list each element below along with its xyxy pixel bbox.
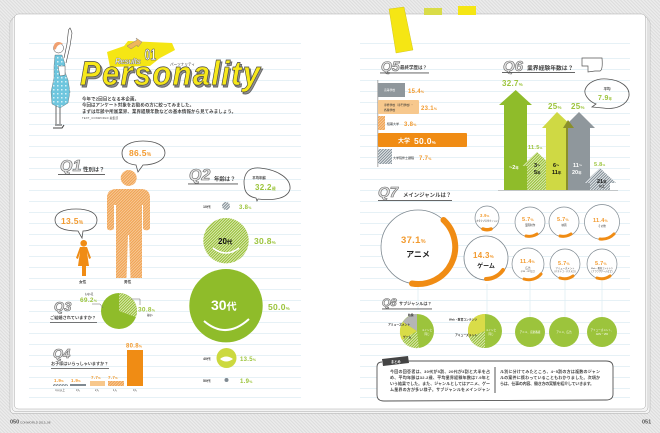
heading: Q3 bbox=[50, 299, 97, 323]
arrow labels: 以上 bbox=[599, 184, 605, 188]
circle: anime: 37.1% bbox=[401, 235, 426, 246]
arrow: 11-20 years bbox=[563, 112, 595, 190]
heading: Q8: サブジャンルは？ bbox=[399, 300, 432, 306]
circle: esports bbox=[475, 206, 499, 230]
arrow labels: 5.8% bbox=[594, 162, 606, 168]
panel: Q5 education bbox=[378, 58, 467, 167]
50s row: 50代 bbox=[203, 378, 211, 383]
circle: web bbox=[587, 249, 617, 279]
heading: Q1 bbox=[58, 158, 105, 175]
bar chart bbox=[53, 344, 143, 392]
icon: woman bbox=[76, 240, 91, 276]
tag: summary bbox=[382, 356, 409, 366]
icon: arrow bbox=[127, 38, 142, 49]
arrow labels: 25% bbox=[548, 102, 562, 111]
circle: film bbox=[549, 207, 579, 237]
heading: Q8 bbox=[382, 297, 432, 309]
callout: 13.5% bbox=[55, 209, 97, 238]
summary text: ム業界の方が多い様子。サブジャンルをメインジャン bbox=[390, 386, 490, 392]
circle: anime, music programs: アニメ、音楽番組 bbox=[520, 330, 541, 334]
circle: esports: オタクプロダクション bbox=[476, 218, 498, 222]
bar: high school: 15.4% bbox=[408, 89, 425, 95]
heading: Q8: Q8 bbox=[382, 297, 398, 309]
circle: production: 漫画制作 bbox=[525, 223, 536, 227]
bar: junior college bbox=[378, 116, 417, 130]
bar chart: 80.8% bbox=[126, 344, 143, 350]
bar: high school bbox=[378, 83, 425, 97]
panel: Q8 sub genre bbox=[382, 297, 617, 348]
arrow labels: 21年 bbox=[597, 179, 607, 185]
panel: Q7 main genre bbox=[378, 184, 620, 284]
bar: vocational: 専修学校（専門学校）・ bbox=[384, 103, 413, 107]
10s row: 10代 bbox=[203, 204, 211, 209]
heading: Q1: 性別は？ bbox=[83, 166, 105, 174]
panel: Q4 children bbox=[51, 344, 143, 392]
bar chart: 7.7% bbox=[108, 375, 118, 380]
arrow labels: 5年 bbox=[534, 170, 541, 176]
bar chart: 3人 bbox=[76, 388, 80, 392]
title: Personality: Personality bbox=[82, 57, 263, 94]
pie: anime sub genre bbox=[388, 313, 434, 348]
circle: production bbox=[515, 207, 545, 237]
10s row: 3.8% bbox=[239, 205, 252, 211]
50s row: 1.9% bbox=[240, 379, 253, 385]
title: Results 01 badge: Results bbox=[115, 57, 142, 66]
circle: amusement, adv: アミューズメント、 bbox=[590, 328, 614, 332]
bar: graduate school bbox=[378, 149, 432, 164]
bar chart: 4人以上 bbox=[55, 388, 65, 392]
callout: average experience bbox=[585, 79, 629, 108]
panel: Q3 marriage: 69.2% bbox=[80, 297, 98, 304]
10s row bbox=[203, 202, 252, 211]
intro text: TEXT_CONWORLD 編集部 bbox=[82, 116, 118, 120]
title: Results 01 badge: 01 bbox=[144, 46, 157, 64]
50s row bbox=[203, 378, 253, 385]
panel: Q1 gender: 男性 bbox=[124, 279, 132, 284]
circle: amusement bbox=[550, 249, 580, 279]
bar: vocational: 各種学校 bbox=[384, 108, 395, 112]
circle: web: 5.7% bbox=[595, 261, 608, 267]
heading: Q2: 年齢は？ bbox=[214, 175, 236, 183]
pie: anime sub genre: アミューズメント bbox=[388, 322, 410, 326]
summary text: いう結果でした。また、ジャンルとしてはアニメ、ゲー bbox=[390, 380, 490, 386]
40s bubble: 13.5% bbox=[240, 357, 257, 363]
circle: amusement: アミューズメント bbox=[556, 266, 575, 270]
heading: Q6: Q6 bbox=[503, 58, 524, 75]
40s bubble: 40代 bbox=[203, 356, 211, 361]
intro text bbox=[82, 96, 236, 120]
circle: anime, advertising bbox=[549, 317, 579, 347]
bar chart: 0人 bbox=[133, 388, 137, 392]
tag: summary: まとめ bbox=[391, 359, 401, 364]
20s bubble bbox=[203, 218, 276, 263]
circle: amusement, adv bbox=[587, 317, 617, 347]
callout: 86.5%: 86.5% bbox=[129, 148, 152, 158]
pie: anime sub genre: メインと bbox=[422, 328, 433, 332]
30s bubble: 30代 bbox=[211, 297, 237, 313]
arrow labels: 25% bbox=[571, 102, 585, 111]
circle: amusement: 5.7% bbox=[558, 261, 571, 267]
arrow labels: ~2年 bbox=[509, 165, 519, 171]
circle: anime bbox=[381, 210, 455, 284]
panel: Q1 gender: 女性 bbox=[79, 279, 87, 284]
heading: Q7: メインジャンルは？ bbox=[403, 192, 451, 199]
callout: 86.5% bbox=[122, 141, 165, 172]
circle: game: 14.3% bbox=[473, 251, 494, 260]
heading: Q2 bbox=[188, 167, 238, 184]
circle: game: ゲーム bbox=[477, 262, 495, 270]
bar chart: 1.9% bbox=[54, 378, 64, 383]
circle: advertising: 広告 bbox=[525, 266, 531, 270]
intro text: まずは年齢や所属業界、業界経験年数などの基本情報から見てみましょう。 bbox=[82, 108, 236, 115]
circle: other: その他 bbox=[598, 224, 606, 228]
pie: game sub genre: 同じ bbox=[488, 332, 494, 336]
summary text: ル別に分けてみたところ、4~5割の方は複数のジャン bbox=[500, 368, 600, 374]
callout: average age: 32.2歳 bbox=[255, 183, 276, 192]
bar chart: 2人 bbox=[95, 388, 99, 392]
icon: man bbox=[107, 170, 150, 278]
bar: junior college: 短期大学 bbox=[387, 121, 399, 126]
callout: 13.5%: 13.5% bbox=[61, 216, 84, 226]
arrow: up to 2 years bbox=[499, 90, 532, 190]
heading: Q4: お子様はいらっしゃいますか？ bbox=[51, 360, 108, 366]
heading: Q6: 業界経験年数は？ bbox=[527, 64, 573, 72]
pie: game sub genre: アミューズメント bbox=[455, 333, 477, 337]
arrow: 21+ years bbox=[584, 168, 616, 190]
sticky tabs bbox=[389, 6, 476, 53]
circle: film: 5.7% bbox=[557, 217, 570, 223]
circle: amusement, adv: ADV・VID bbox=[596, 332, 608, 336]
pie: game sub genre: Web・教育コンテンツ bbox=[449, 318, 477, 322]
panel: Q2 age bbox=[188, 167, 290, 385]
heading: Q5: 最終学歴は？ bbox=[400, 64, 427, 71]
title: Results 01 badge bbox=[107, 38, 175, 67]
20s bubble: 20代 bbox=[218, 237, 233, 246]
heading: Q7 bbox=[378, 184, 452, 201]
icon: hand note bbox=[582, 58, 602, 72]
circle: other bbox=[584, 204, 620, 240]
bar: junior college: 3.8% bbox=[404, 122, 417, 128]
heading: Q6 bbox=[502, 58, 575, 75]
panel: Q6 years of experience bbox=[498, 58, 629, 191]
arrow: 6-11 years bbox=[542, 112, 574, 190]
pie: anime sub genre: ゲーム bbox=[403, 335, 412, 339]
bar: graduate school: 大学院修士課程 bbox=[393, 155, 414, 160]
40s bubble bbox=[203, 348, 257, 368]
pie: anime sub genre: 同じ bbox=[424, 332, 430, 336]
circle: game bbox=[464, 236, 508, 280]
20s bubble: 30.8% bbox=[254, 236, 276, 246]
footer: right folio: 051 bbox=[642, 420, 651, 426]
30s bubble: 50.0% bbox=[268, 302, 290, 312]
callout: average experience: 平均 bbox=[604, 86, 611, 91]
illustration: pointing woman bbox=[51, 28, 72, 128]
heading: Q3: Q3 bbox=[54, 299, 72, 314]
summary text bbox=[390, 368, 600, 392]
heading: Q4 bbox=[51, 346, 109, 369]
panel: summary box bbox=[377, 356, 613, 401]
arrow labels: 11年 bbox=[552, 170, 562, 176]
30s bubble bbox=[189, 269, 290, 342]
circle: film: 映画 bbox=[561, 223, 567, 227]
circle: anime: アニメ bbox=[406, 250, 430, 259]
arrow labels: 20年 bbox=[572, 170, 582, 176]
callout: average experience: 7.9年 bbox=[598, 95, 613, 102]
circle: anime, music programs bbox=[515, 317, 545, 347]
arrow labels: 6~ bbox=[553, 163, 559, 169]
panel: Q3 marriage: いいえ bbox=[85, 292, 94, 296]
circle: web: Web・教育コンテンツ bbox=[591, 266, 613, 270]
circle: esports: 3.9% bbox=[480, 213, 490, 218]
arrow labels: 11.5% bbox=[528, 145, 543, 151]
title: Personality: パーソナリティ bbox=[170, 62, 195, 66]
intro text: 今年で2回目となる本企画。 bbox=[82, 96, 139, 102]
bar: university: 大学 bbox=[398, 137, 410, 145]
arrow labels bbox=[502, 79, 607, 188]
circle: other: 11.4% bbox=[593, 218, 609, 224]
heading: Q2: Q2 bbox=[189, 167, 210, 184]
heading: Q5: Q5 bbox=[381, 58, 400, 74]
intro text: 今回はアンケート対象をお勧めの方に絞ってみました。 bbox=[82, 102, 194, 108]
summary text: め、平均年齢は32.2歳、平均業界経験年数は7.9年と bbox=[390, 374, 490, 380]
bar: graduate school: 7.7% bbox=[419, 156, 432, 162]
bar chart: 1.9% bbox=[71, 378, 81, 383]
summary text: 今回の回答者は、30代が5割、20代が3割と大半を占 bbox=[390, 368, 490, 374]
callout: average age bbox=[244, 168, 290, 201]
circle: anime, advertising: アニメ、広告 bbox=[556, 330, 572, 334]
bar chart: 7.7% bbox=[91, 375, 101, 380]
bar: university: 50.0% bbox=[414, 136, 436, 146]
heading: Q7: Q7 bbox=[378, 184, 399, 201]
pie: anime sub genre: 映像 bbox=[408, 313, 414, 317]
arrow: 3-5 years bbox=[522, 152, 552, 190]
pie chart bbox=[92, 293, 140, 329]
circle: web: （ブラウザゲームなど） bbox=[590, 269, 614, 273]
circle: advertising: 11.4% bbox=[520, 259, 536, 265]
circle: amusement: （パチンコ・パチスロ） bbox=[553, 269, 577, 273]
summary text: ルの案件に携わっていることもわかりました。次項か bbox=[500, 374, 600, 380]
circle: advertising bbox=[512, 248, 544, 280]
pie: game sub genre bbox=[449, 314, 502, 348]
bar: vocational: 23.1% bbox=[421, 106, 438, 112]
bar chart: 1人 bbox=[113, 388, 117, 392]
pie: game sub genre: メインと bbox=[486, 328, 497, 332]
callout: average age: 平均年齢 bbox=[252, 175, 266, 180]
heading: Q4: Q4 bbox=[53, 346, 71, 361]
bar: vocational bbox=[378, 100, 438, 114]
heading: Q5 bbox=[380, 58, 429, 74]
summary text: らは、仕事の内容、働き方の実態を紹介していきます。 bbox=[500, 380, 594, 386]
bar: university bbox=[378, 133, 467, 147]
panel: Q1 gender bbox=[55, 141, 165, 284]
arrow labels: 32.7% bbox=[502, 79, 523, 88]
heading: Q1: Q1 bbox=[60, 158, 81, 175]
circle: advertising: （CM・VPなど） bbox=[519, 269, 537, 273]
footer: left folio: 050 CONWORLD 2015_08 bbox=[10, 420, 51, 426]
heading: Q3: ご結婚されていますか？ bbox=[50, 314, 96, 321]
panel: Q3 marriage bbox=[50, 292, 156, 329]
circle: production: 5.7% bbox=[522, 217, 535, 223]
arrow labels: 3~ bbox=[534, 163, 540, 169]
bar: high school: 高等学校 bbox=[384, 88, 395, 92]
arrow labels: 11~ bbox=[573, 163, 582, 169]
panel: Q3 marriage: はい bbox=[147, 313, 153, 317]
title: Personality: Personality bbox=[80, 55, 262, 92]
panel: Q3 marriage: 30.8% bbox=[138, 306, 156, 314]
